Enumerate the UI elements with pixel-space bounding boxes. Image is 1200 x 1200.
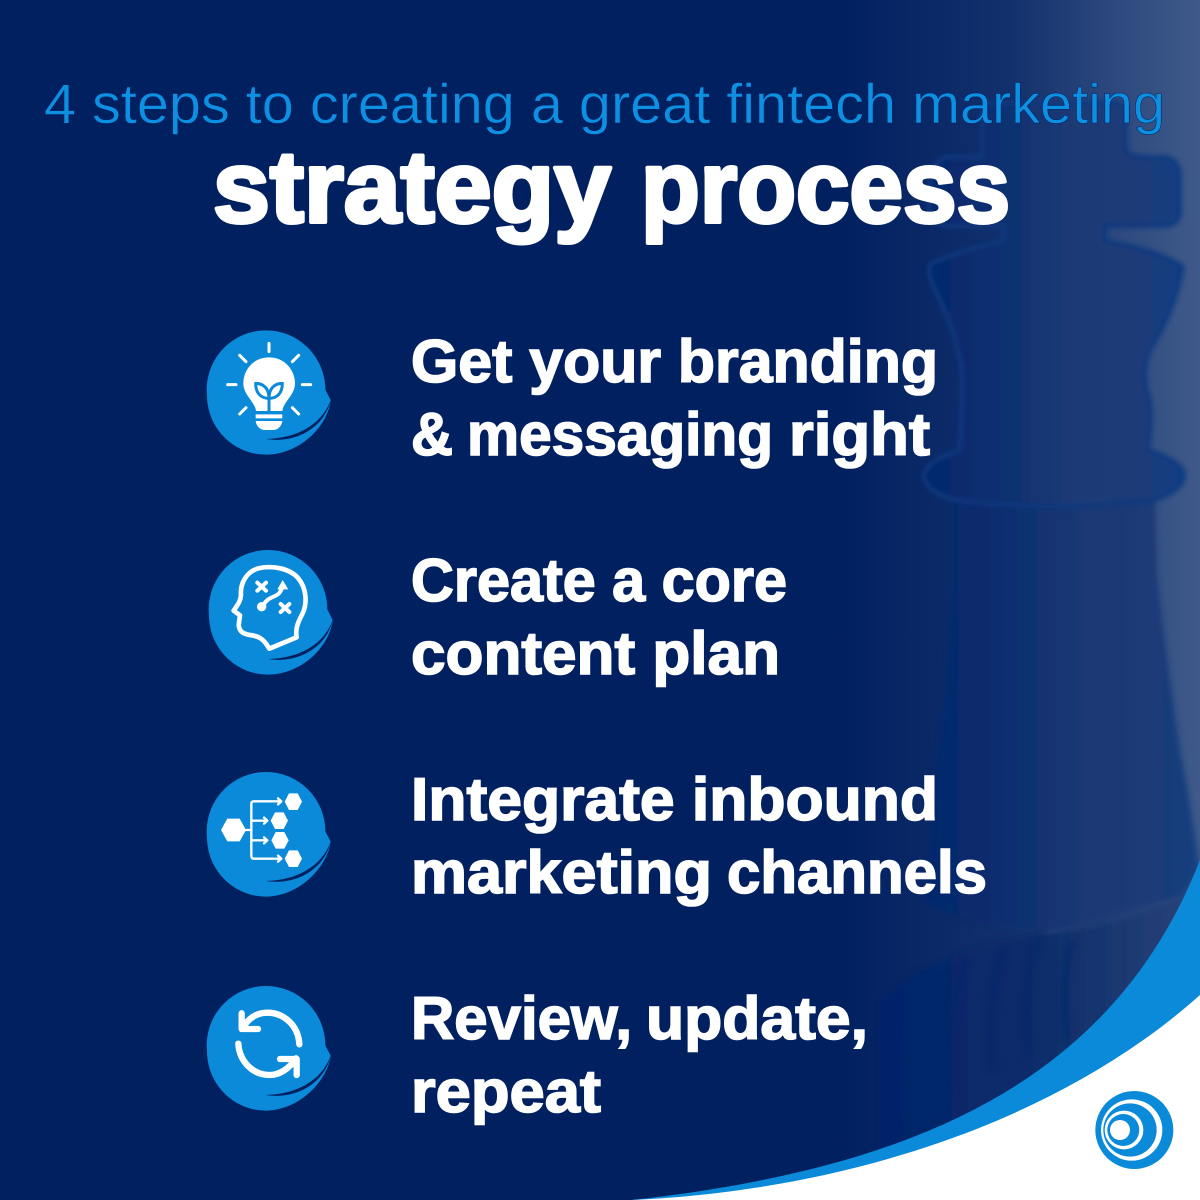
icon: hexagon flow [207, 772, 331, 897]
step 4 text: Review, [411, 985, 632, 1052]
step 2 text: content plan [411, 620, 780, 687]
step 3 text: marketing [411, 839, 712, 906]
heading: strategy [213, 130, 611, 244]
step 1 text: right [789, 401, 930, 468]
icon: refresh arrows [207, 986, 331, 1111]
logo: spiral circle [1095, 1091, 1173, 1169]
step 1: branding and messaging [207, 328, 938, 468]
step 4 text: update, [646, 985, 868, 1052]
heading: process [641, 130, 1010, 244]
chess king photo [880, 103, 1200, 1200]
white corner [632, 995, 1200, 1200]
step 3 text: channels [727, 839, 987, 906]
title line: 4 steps to creating a great fintech marketing [44, 72, 1165, 135]
blue swoosh band [632, 860, 1200, 1200]
icon: light bulb with plant [207, 330, 331, 455]
icon: head with strategy [209, 550, 333, 675]
step 4 text: repeat [411, 1058, 601, 1125]
step 2: core content plan [209, 547, 787, 687]
step 1 text: messaging [467, 401, 773, 468]
step 4: review update repeat [207, 985, 868, 1125]
step 3: inbound marketing channels [207, 766, 987, 906]
step 3 text: Integrate inbound [411, 766, 938, 833]
step 1 text: Get your branding [411, 328, 938, 395]
step 1 text: & [411, 401, 453, 468]
step 2 text: Create a core [411, 547, 787, 614]
